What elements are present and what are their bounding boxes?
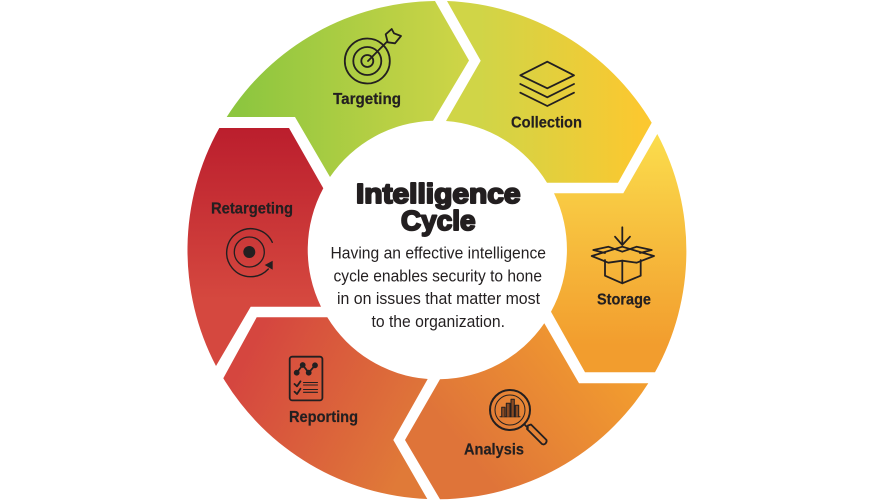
label: reporting: Reporting (289, 409, 358, 426)
label: analysis: Analysis (464, 442, 524, 458)
heading: intelligence cycle (356, 178, 520, 236)
icon: magnifier with bars (490, 390, 547, 444)
segment: reporting (223, 317, 428, 499)
label: collection: Collection (511, 114, 582, 132)
segment: analysis (405, 323, 648, 499)
panel: reporting (223, 317, 428, 499)
segment: storage (551, 134, 686, 372)
panel: analysis (405, 323, 648, 499)
body description: cycle enables security to hone (334, 268, 542, 286)
segment: retargeting (187, 128, 323, 366)
center text block (330, 178, 546, 331)
label: targeting: Targeting (333, 91, 401, 108)
segment: collection (446, 1, 652, 183)
heading: intelligence cycle: Intelligence (356, 178, 520, 209)
icon: stacked layers (520, 62, 574, 106)
body description (330, 244, 546, 331)
panel: storage (551, 134, 686, 372)
body description: Having an effective intelligence (330, 244, 546, 262)
icon: box with arrow (592, 227, 654, 283)
body description: to the organization. (372, 313, 505, 331)
panel: targeting (227, 1, 469, 177)
heading: intelligence cycle: Cycle (401, 205, 476, 236)
icon: target with dart (345, 29, 401, 84)
panel: collection (446, 1, 652, 183)
panel: retargeting (187, 128, 323, 366)
label: retargeting: Retargeting (211, 200, 293, 218)
icon: retargeting circular arrow (227, 229, 273, 277)
body description: in on issues that matter most (337, 290, 540, 308)
segment: targeting (227, 1, 469, 177)
label: storage: Storage (597, 292, 651, 308)
icon: report document (290, 357, 322, 400)
